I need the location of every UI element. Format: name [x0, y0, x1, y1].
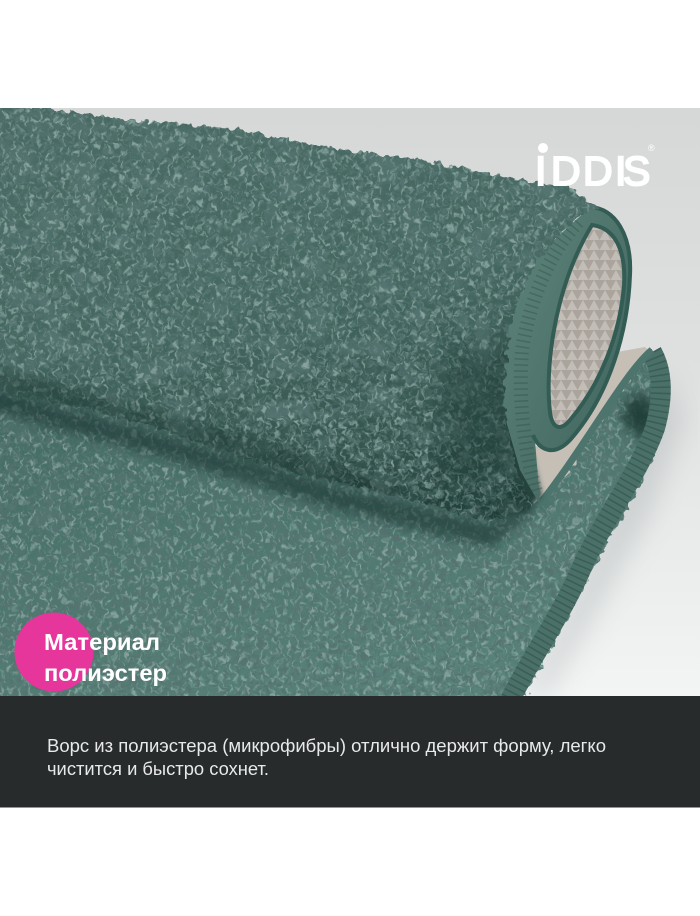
- logo: iDDIS: IDDIS: [535, 148, 650, 194]
- roll end: backing and binding: [490, 207, 630, 518]
- dark band at roll lower edge: [0, 360, 540, 520]
- dark fold: [622, 392, 660, 440]
- backing with triangles: [549, 225, 624, 427]
- badge heading: Материал: [44, 629, 160, 655]
- shadow under roll: [0, 380, 570, 548]
- rolled pile: [0, 90, 620, 530]
- flap backing: [536, 347, 648, 498]
- registered mark: ®: [648, 143, 655, 153]
- badge heading: полиэстер: [44, 660, 167, 686]
- product photo: rolled bath mat: [0, 90, 700, 740]
- shadow next to mat: [525, 370, 682, 696]
- lower rug surface: [0, 347, 671, 696]
- badge heading: [44, 629, 167, 686]
- description text: Ворс из полиэстера (микрофибры) отлично держит форму, легко: [47, 736, 606, 756]
- dark core near end: [440, 330, 530, 490]
- flap seam: [537, 350, 652, 506]
- lower rug binding: [510, 352, 661, 700]
- description panel: [0, 696, 700, 808]
- photo backdrop: [0, 108, 700, 696]
- description text: чистится и быстро сохнет.: [47, 759, 269, 779]
- gap filler behind binding: [495, 422, 546, 520]
- description text: [47, 736, 606, 779]
- binding band: [500, 207, 630, 505]
- badge circle: [14, 612, 94, 692]
